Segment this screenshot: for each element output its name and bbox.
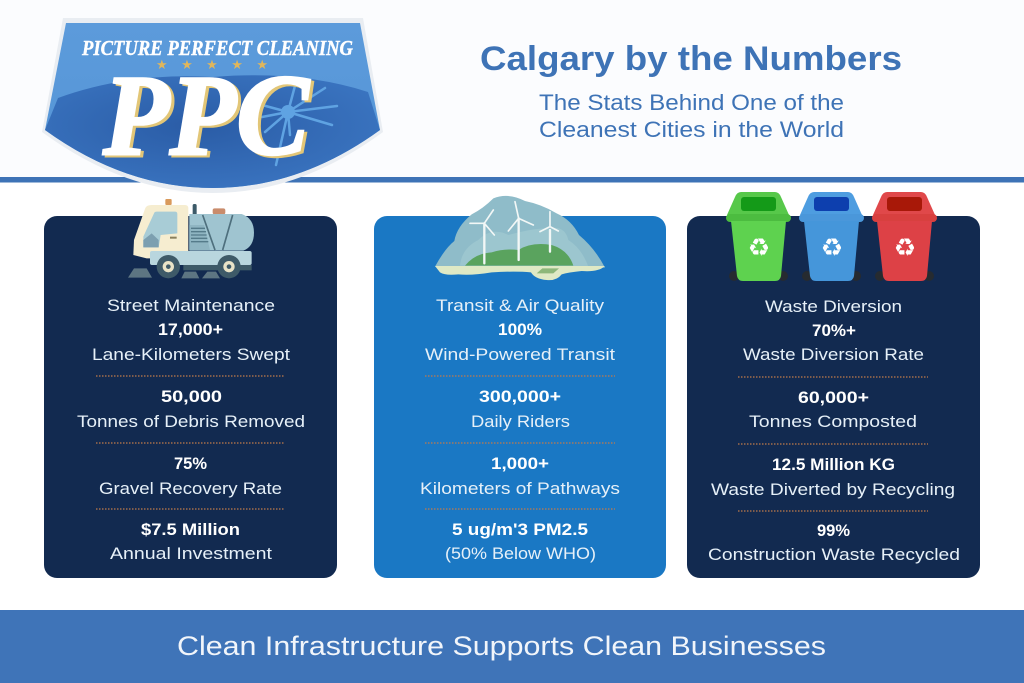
icon: blue recycling bin: ♻ [821,233,843,262]
heading: Street Maintenance [107,296,275,315]
stat: investment: $7.5 Million [141,520,240,539]
icon: blue recycling bin [799,192,864,281]
stat: construction: Construction Waste Recycled [708,545,960,564]
logo PPC letters: PPC [102,52,311,180]
heading: Transit & Air Quality [436,296,605,315]
stat: recycling [711,455,955,499]
stat: 17,000+ swept: 17,000+ [158,320,223,339]
stat: 100% wind: Wind-Powered Transit [425,345,615,364]
logo sparkle [262,82,337,165]
logo PPC shadow: PPC [105,54,314,182]
logo stars: ★★★★★ [156,58,268,73]
icon: red recycling bin [872,192,937,281]
stat: 17,000+ swept [92,320,290,364]
stat: 75% gravel: 75% [174,454,207,473]
panel: transit and air quality [374,196,666,578]
stat: composted: Tonnes Composted [749,412,917,431]
panel: street maintenance [44,199,337,578]
header divider bar [0,177,1024,182]
stat: 70%+ [743,321,924,364]
stat: 50,000 tonnes: Tonnes of Debris Removed [77,412,305,431]
footer text: Clean Infrastructure Supports Clean Businesses [177,631,826,661]
stat: PM2.5 [445,520,596,563]
logo: Picture Perfect Cleaning [42,18,383,193]
icon: street sweeper truck [128,199,254,278]
stat: recycling: Waste Diverted by Recycling [711,480,955,499]
stat: pathways: Kilometers of Pathways [420,479,620,498]
stat: construction: 99% [817,521,850,540]
stat: construction [708,521,960,564]
stat: riders [471,387,570,431]
stat: riders: Daily Riders [471,412,570,431]
footer banner [0,610,1024,683]
subtitle: The Stats Behind One of the [539,90,844,115]
stat: 70%+: Waste Diversion Rate [743,345,924,364]
stat: 50,000 tonnes: 50,000 [161,387,222,406]
stat: 50,000 tonnes [77,387,305,431]
stat: composted [749,388,917,431]
stat: riders: 300,000+ [479,387,561,406]
stat: 75% gravel [99,454,282,498]
stat: pathways [420,454,620,498]
stat: composted: 60,000+ [798,388,869,407]
icon: green recycling bin [726,192,791,281]
stat: investment [110,520,272,563]
panel: waste diversion [687,192,980,578]
logo name: PICTURE PERFECT CLEANING [81,36,353,60]
icon: red recycling bin: ♻ [894,233,916,262]
icon: green recycling bin: ♻ [748,233,770,262]
subtitle: Cleanest Cities in the World [539,117,844,142]
stat: 75% gravel: Gravel Recovery Rate [99,479,282,498]
icon: wind turbines landscape [435,196,605,280]
stat: recycling: 12.5 Million KG [772,455,895,474]
stat: pathways: 1,000+ [491,454,549,473]
stat: 100% wind: 100% [498,320,542,339]
title: Calgary by the Numbers [480,40,902,78]
stat: investment: Annual Investment [110,544,272,563]
stat: 100% wind [425,320,615,364]
stat: 17,000+ swept: Lane-Kilometers Swept [92,345,290,364]
stat: 70%+: 70%+ [812,321,856,340]
heading: Waste Diversion [765,297,902,316]
stat: PM2.5: 5 ug/m'3 PM2.5 [452,520,588,539]
subtitle [539,90,844,142]
stat: PM2.5: (50% Below WHO) [445,544,596,563]
